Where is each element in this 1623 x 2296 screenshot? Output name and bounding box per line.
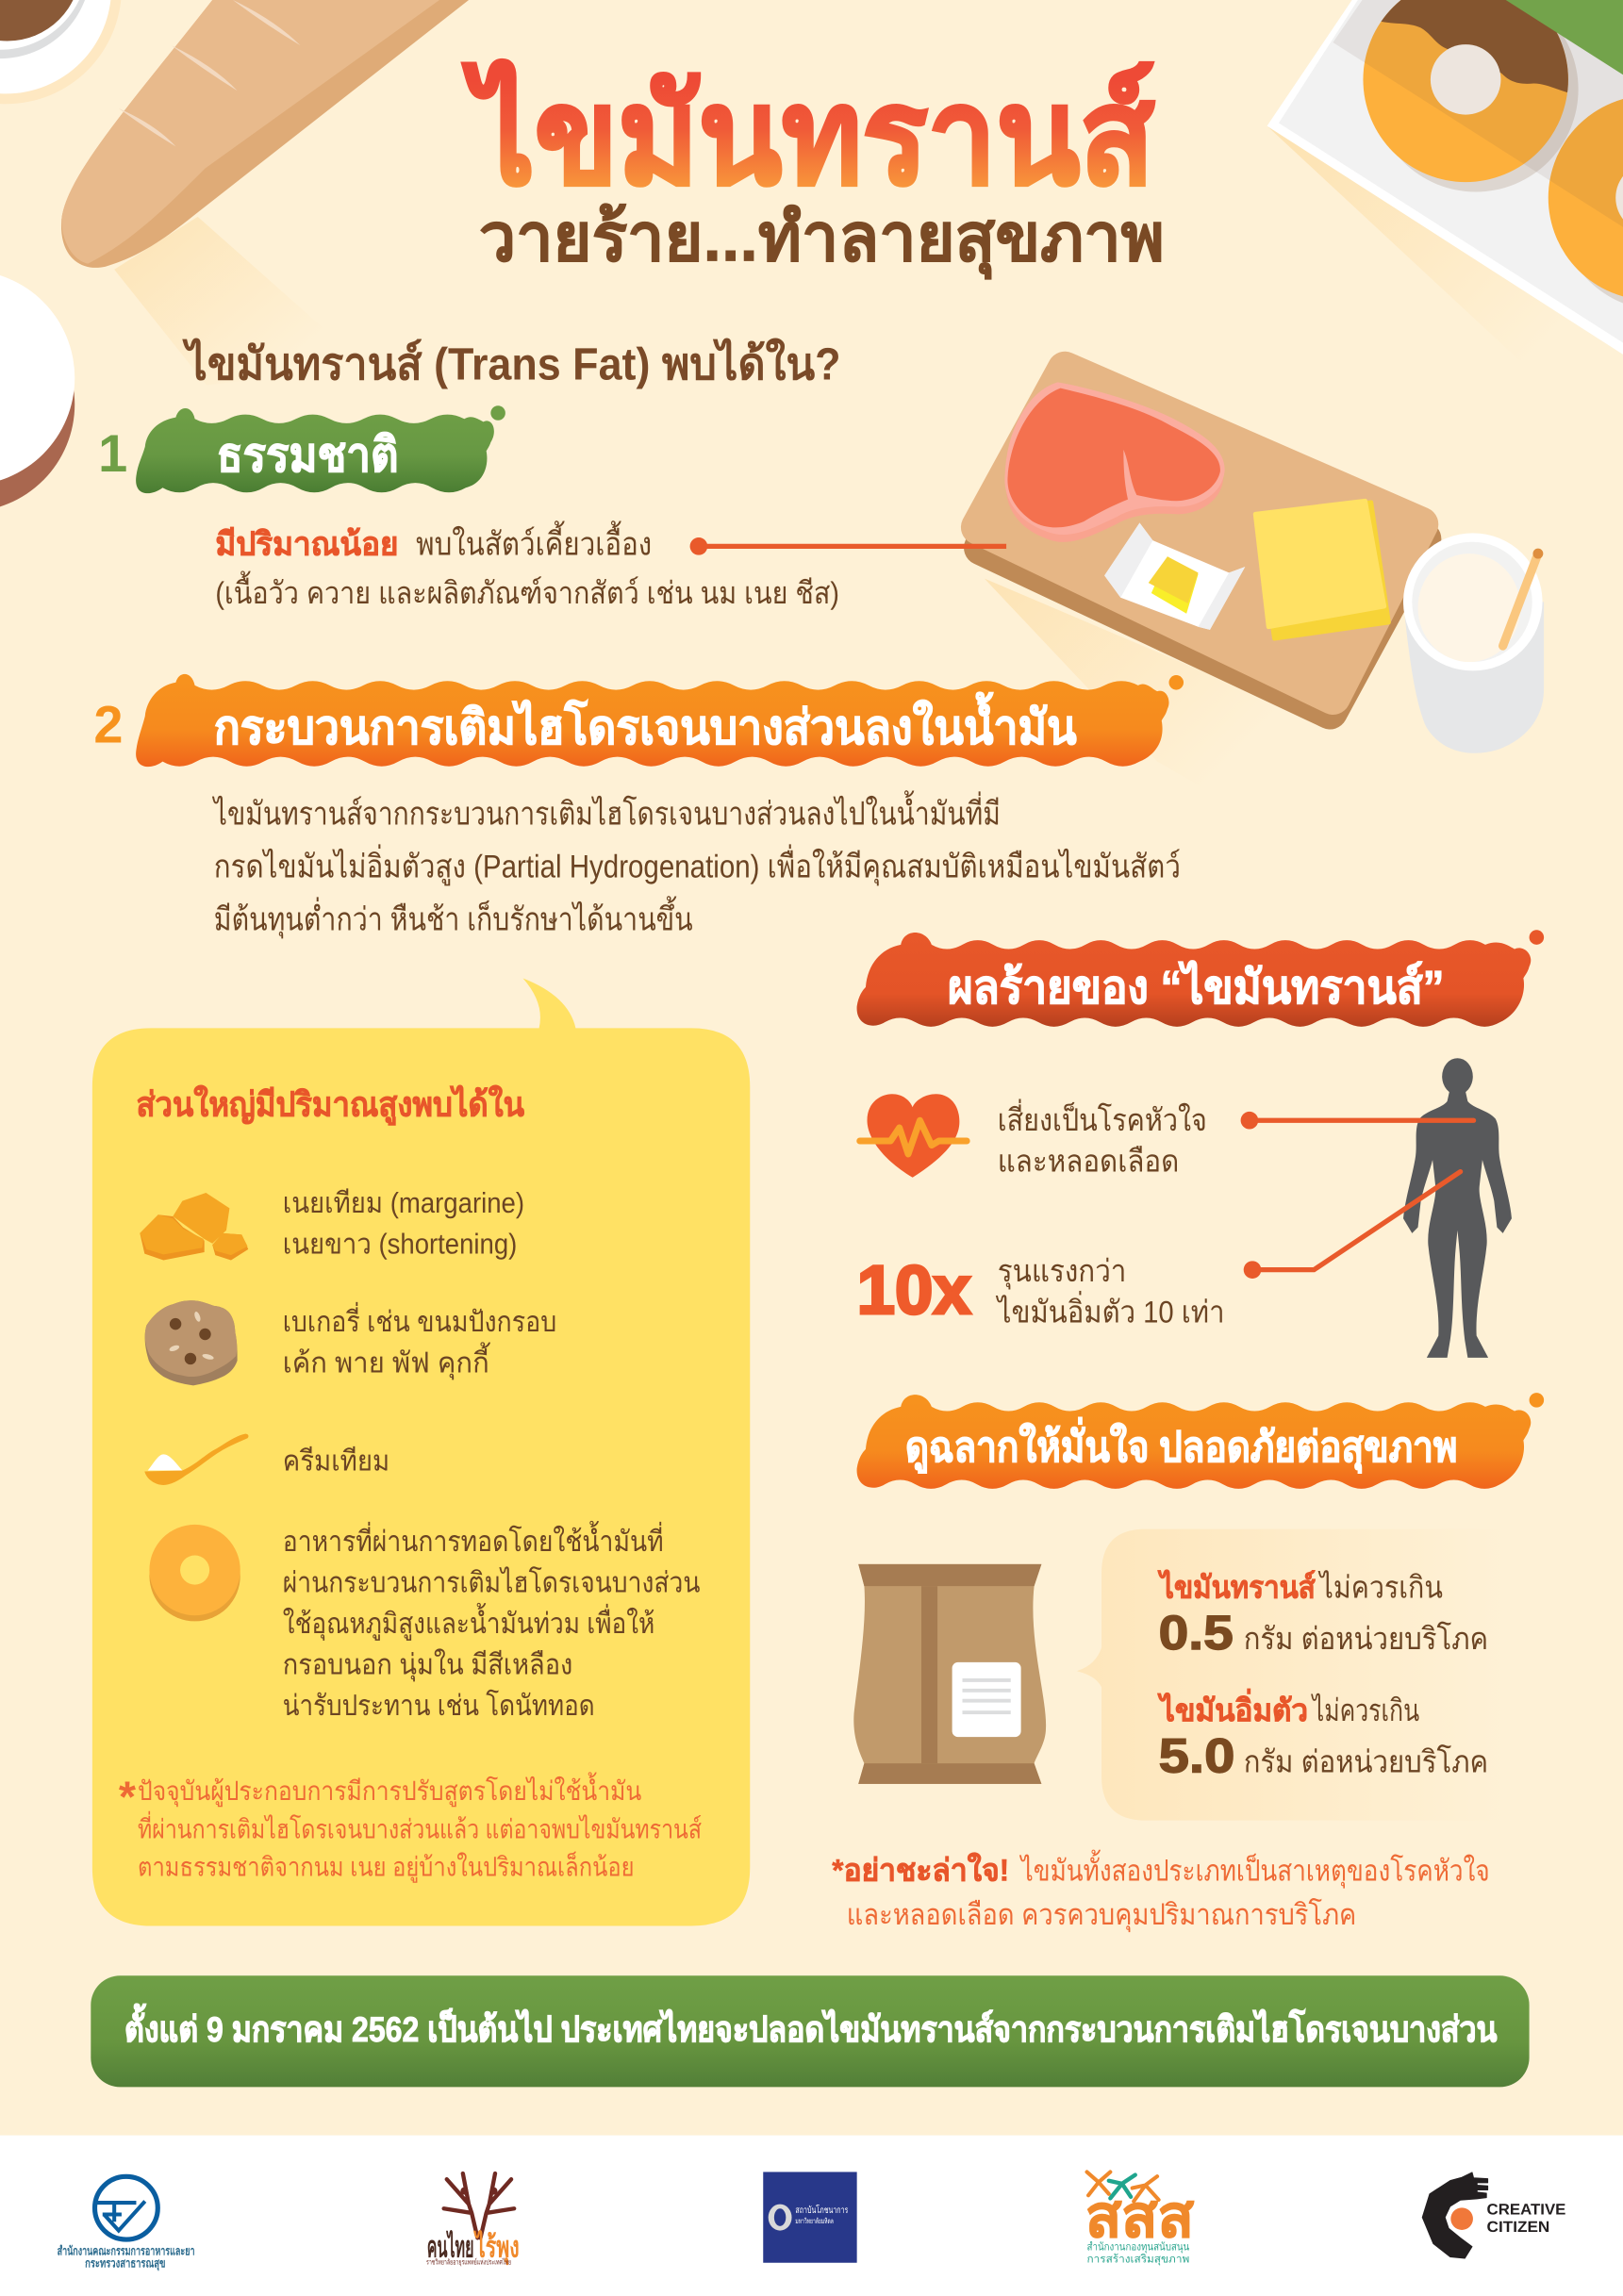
- panel heading: ส่วนใหญ่มีปริมาณสูงพบได้ใน: [136, 1083, 524, 1126]
- logo: Creative Citizen: [1422, 2172, 1565, 2258]
- panel: common high trans fat foods: [92, 979, 750, 1925]
- logo: Creative Citizen: CITIZEN: [1487, 2219, 1549, 2237]
- footnote: ที่ผ่านการเติมไฮโดรเจนบางส่วนแล้ว แต่อาจพบไขมันทรานส์: [138, 1810, 702, 1844]
- label: partial hydrogenation: กระบวนการเติมไฮโดรเจนบางส่วนลงในน้ำมัน: [214, 691, 1077, 754]
- warning note: ไขมันทั้งสองประเภทเป็นสาเหตุของโรคหัวใจ: [1019, 1848, 1490, 1890]
- banner: Thailand trans fat free: [91, 1975, 1530, 2087]
- footnote: [119, 1771, 702, 1883]
- stat: 10x: 10x: [857, 1250, 971, 1329]
- trans fat limit: ไม่ควรเกิน: [1317, 1570, 1443, 1605]
- icon: baguette: [61, 0, 469, 268]
- icon: coffee cup top-left: [0, 0, 122, 104]
- text: bakery: เค้ก พาย พัฟ คุกกี้: [283, 1342, 491, 1381]
- logo: Institute of Nutrition: มหาวิทยาลัยมหิดล: [795, 2216, 834, 2226]
- icon: white plate left: [0, 271, 75, 512]
- trans fat limit: กรัม ต่อหน่วยบริโภค: [1244, 1621, 1488, 1657]
- text: heart disease risk: เสี่ยงเป็นโรคหัวใจ: [998, 1098, 1207, 1138]
- warning note: และหลอดเลือด ควรควบคุมปริมาณการบริโภค: [847, 1896, 1356, 1933]
- label: check the label: [857, 1393, 1544, 1489]
- logo: Institute of Nutrition: สถาบันโภชนาการ: [795, 2205, 849, 2216]
- icon: human body: [1403, 1058, 1512, 1358]
- saturated fat limit: [1157, 1689, 1488, 1782]
- saturated fat limit: ไม่ควรเกิน: [1310, 1693, 1419, 1728]
- footnote: *: [119, 1774, 136, 1822]
- label: harmful effects: ผลร้ายของ “ไขมันทรานส์”: [948, 959, 1444, 1014]
- soft food shadows: [114, 126, 1623, 820]
- saturated fat limit: กรัม ต่อหน่วยบริโภค: [1244, 1744, 1488, 1779]
- icon: food package: [853, 1564, 1046, 1784]
- text: fried food: ใช้อุณหภูมิสูงและน้ำมันท่วม เพื่อให้: [283, 1602, 654, 1642]
- text: bakery: [283, 1300, 556, 1381]
- icon: cookie: [145, 1300, 238, 1385]
- butter block: [1255, 501, 1388, 638]
- warning note: *อย่าชะล่าใจ!: [832, 1851, 1009, 1888]
- butter packet: [1104, 523, 1245, 630]
- logo: Thai people no belly: คนไทย: [427, 2229, 473, 2264]
- label: check the label: ดูฉลากให้มั่นใจ ปลอดภัยต่อสุขภาพ: [905, 1416, 1457, 1475]
- text: natural source: [215, 520, 839, 611]
- paragraph: hydrogenation: [211, 789, 1181, 939]
- text: fried food: อาหารที่ผ่านการทอดโดยใช้น้ำมันที่: [283, 1520, 664, 1559]
- saturated fat limit: ไขมันอิ่มตัว: [1157, 1689, 1308, 1728]
- logo: Thai people no belly: ราชวิทยาลัยอายุรแพทย์แห่งประเทศไทย: [426, 2257, 511, 2267]
- trans fat limit: 0.5: [1159, 1605, 1234, 1660]
- text: ten times worse: ไขมันอิ่มตัว 10 เท่า: [995, 1290, 1225, 1330]
- subtitle: วายร้าย...ทำลายสุขภาพ: [479, 199, 1165, 280]
- logo: ThaiHealth: สำนักงานกองทุนสนับสนุน: [1087, 2240, 1189, 2254]
- connector line: heart: [1241, 1112, 1474, 1130]
- text: heart disease risk: และหลอดเลือด: [998, 1146, 1179, 1179]
- text: ten times worse: [995, 1255, 1225, 1330]
- footer: [0, 2136, 1623, 2296]
- title: ไขมันทรานส์: [461, 58, 1155, 212]
- text: bakery: เบเกอรี่ เช่น ขนมปังกรอบ: [283, 1300, 556, 1339]
- text: natural source: พบในสัตว์เคี้ยวเอื้อง: [416, 520, 652, 562]
- number 1: 1: [98, 423, 127, 484]
- text: margarine: เนยเทียม (margarine): [283, 1188, 524, 1220]
- trans fat limit: ไขมันทรานส์: [1157, 1569, 1316, 1605]
- warning note: [832, 1848, 1490, 1933]
- logo: FDA Thailand: สำนักงานคณะกรรมการอาหารและยา: [58, 2243, 195, 2258]
- text: margarine: [283, 1188, 524, 1261]
- logo: Thai people no belly: ไร้พุง: [473, 2229, 520, 2266]
- icon: heart with pulse: [860, 1094, 967, 1178]
- logo: FDA Thailand: กระทรวงสาธารณสุข: [85, 2255, 166, 2271]
- label: natural: [136, 405, 505, 493]
- footnote: ปัจจุบันผู้ประกอบการมีการปรับสูตรโดยไม่ใช้น้ำมัน: [138, 1771, 641, 1808]
- logo: Creative Citizen: CREATIVE: [1487, 2202, 1565, 2219]
- paragraph: hydrogenation: ไขมันทรานส์จากกระบวนการเติมไฮโดรเจนบางส่วนลงไปในน้ำมันที่มี: [211, 789, 1001, 832]
- text: fried food: ผ่านกระบวนการเติมไฮโดรเจนบางส่วน: [283, 1565, 700, 1599]
- logo: Thai people no belly: [426, 2173, 520, 2267]
- text: natural source: มีปริมาณน้อย: [215, 526, 398, 562]
- paragraph: hydrogenation: มีต้นทุนต่ำกว่า หืนช้า เก็บรักษาได้นานขึ้น: [214, 895, 693, 939]
- label: natural: ธรรมชาติ: [217, 428, 398, 482]
- number 2: 2: [93, 694, 124, 754]
- icon: donut tray top-right: [1267, 0, 1623, 355]
- trans fat limit: [1157, 1569, 1488, 1660]
- logo: ThaiHealth: [1085, 2172, 1195, 2266]
- text: margarine: เนยขาว (shortening): [283, 1229, 517, 1261]
- paragraph: hydrogenation: กรดไขมันไม่อิ่มตัวสูง (Partial Hydrogenation) เพื่อให้มีคุณสมบัติเหมือนไขมันสัตว์: [214, 844, 1181, 886]
- footnote: ตามธรรมชาติจากนม เนย อยู่บ้างในปริมาณเล็กน้อย: [138, 1851, 635, 1883]
- icon: glass of milk: [1403, 533, 1544, 753]
- logo: Institute of Nutrition: [763, 2172, 857, 2263]
- connector line: severity: [1244, 1172, 1461, 1279]
- text: ten times worse: รุนแรงกว่า: [998, 1255, 1126, 1290]
- section heading: where found: ไขมันทรานส์ (Trans Fat) พบได้ใน?: [182, 337, 841, 389]
- text: fried food: น่ารับประทาน เช่น โดนัททอด: [283, 1689, 595, 1723]
- text: heart disease risk: [998, 1098, 1207, 1179]
- text: natural source: (เนื้อวัว ควาย และผลิตภัณฑ์จากสัตว์ เช่น นม เนย ชีส): [215, 570, 839, 611]
- logo: ThaiHealth: การสร้างเสริมสุขภาพ: [1087, 2253, 1189, 2266]
- logo: FDA Thailand: [58, 2176, 195, 2271]
- saturated fat limit: 5.0: [1159, 1728, 1234, 1782]
- text: creamer: ครีมเทียม: [283, 1445, 389, 1478]
- label: partial hydrogenation: [136, 674, 1184, 767]
- label: harmful effects: [857, 930, 1544, 1027]
- logo: ThaiHealth: สสส: [1085, 2185, 1195, 2250]
- connector line: natural: [690, 537, 1006, 555]
- meat: [1006, 384, 1223, 542]
- icon: donut: [149, 1525, 240, 1621]
- text: fried food: [283, 1520, 700, 1723]
- text: fried food: กรอบนอก นุ่มใน มีสีเหลือง: [283, 1647, 572, 1683]
- icon: margarine: [140, 1193, 248, 1261]
- icon: spoon with creamer: [144, 1434, 248, 1485]
- icon: cutting board with meat and butter: [979, 369, 1424, 712]
- callout: daily limits: [1077, 1529, 1509, 1821]
